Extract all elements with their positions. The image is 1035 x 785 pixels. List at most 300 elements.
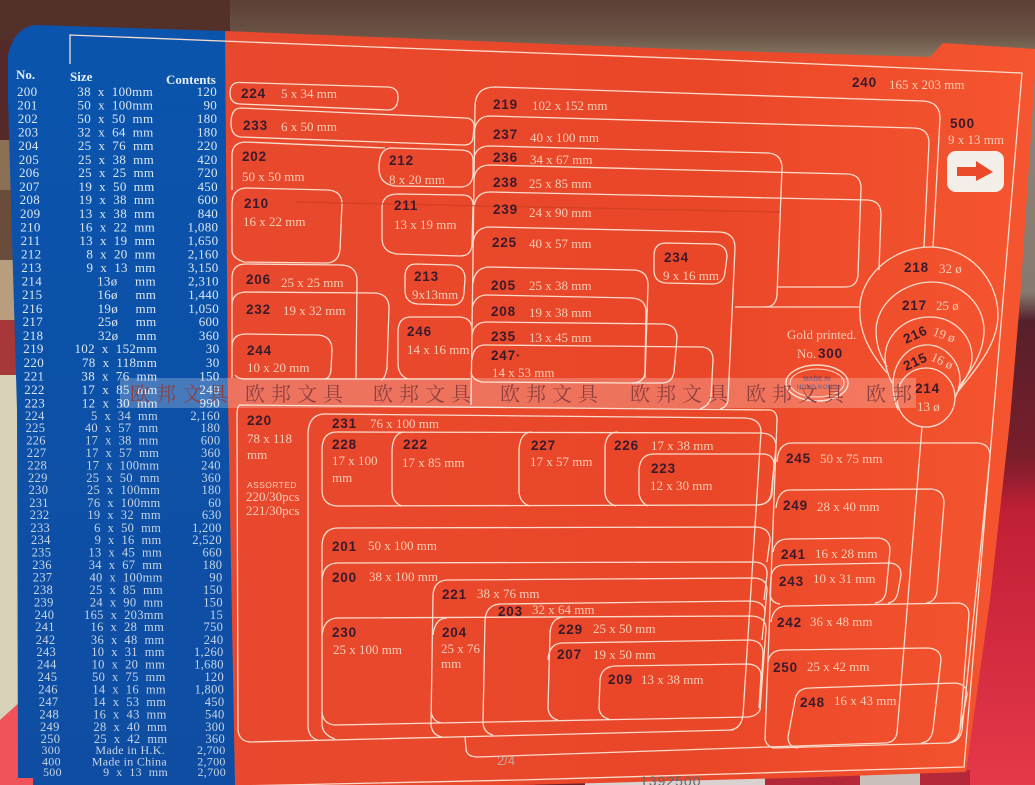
table rows 200 to 223: 19ø mm (98, 301, 156, 316)
table rows 200 to 223: 202 (18, 111, 38, 126)
table rows 224 to 500: 14 x 16 mm (92, 682, 166, 696)
table rows 224 to 500: 246 (38, 682, 58, 696)
label dimensions: 34 x 67 mm (530, 152, 592, 167)
table rows 224 to 500: 241 (35, 620, 55, 634)
table rows 224 to 500: 233 (30, 521, 50, 535)
table rows 224 to 500: 10 x 20 mm (92, 658, 165, 672)
table rows 224 to 500: 1,800 (195, 682, 224, 696)
upper-left label outlines (230, 82, 474, 380)
table rows 224 to 500: 235 (32, 546, 51, 560)
table rows 224 to 500: 228 (27, 458, 47, 472)
table rows 224 to 500: 9 x 13 mm (103, 765, 168, 779)
table rows 200 to 223: 205 (19, 152, 39, 167)
table rows 200 to 223: 600 (198, 192, 218, 207)
table rows 200 to 223: 240 (199, 382, 220, 397)
table rows 224 to 500: 13 x 45 mm (88, 546, 162, 560)
table rows 224 to 500: 60 (208, 496, 221, 510)
table rows 200 to 223: 2,160 (188, 246, 218, 262)
table rows 200 to 223: 223 (25, 396, 45, 410)
icon: made in Hong Kong oval seal (786, 365, 848, 401)
label numbers: 239 (493, 202, 518, 217)
label dimensions: 50 x 50 mm (242, 169, 304, 184)
table rows 224 to 500: 750 (204, 620, 223, 634)
label numbers: 249 (783, 498, 808, 513)
table rows 200 to 223: 215 (22, 287, 42, 302)
table rows 200 to 223: 8 x 20 mm (86, 246, 156, 262)
table rows 200 to 223: 30 (206, 355, 220, 370)
label numbers: 213 (414, 269, 439, 284)
table rows 224 to 500: 600 (201, 434, 220, 448)
table rows 200 to 223: 990 (199, 396, 220, 410)
table rows 224 to 500: 10 x 31 mm (91, 645, 165, 659)
label numbers: 237 (493, 127, 518, 142)
table rows 200 to 223: 50 x 100mm (77, 98, 153, 112)
label dimensions: 38 x 100 mm (369, 569, 438, 584)
assorted note: 221/30pcs (246, 503, 299, 518)
label dimensions: mm (247, 447, 267, 462)
table rows 200 to 223: 25 x 25 mm (78, 165, 154, 180)
table rows 224 to 500: Made in H.K. (95, 743, 165, 757)
label numbers: 226 (614, 438, 639, 453)
table rows 200 to 223: 214 (22, 274, 42, 288)
table rows 224 to 500: 1,680 (194, 658, 224, 672)
assorted note: 220/30pcs (246, 489, 299, 504)
table rows 200 to 223: 16ø mm (97, 287, 156, 302)
label dimensions: 32 ø (939, 261, 962, 276)
table rows 200 to 223: 211 (21, 233, 41, 248)
table rows 200 to 223: 1,650 (188, 233, 218, 248)
watermark band: 欧邦文具 (130, 383, 234, 406)
table rows 224 to 500: 227 (27, 446, 46, 460)
table rows 200 to 223: 25 x 38 mm (78, 152, 154, 167)
label dimensions: 25 ø (936, 298, 959, 313)
label numbers: 245 (786, 451, 811, 466)
label numbers: 225 (492, 235, 517, 250)
label numbers: 211 (394, 198, 418, 213)
table rows 224 to 500: 229 (28, 471, 48, 485)
table rows 224 to 500: 630 (202, 508, 222, 522)
table rows 224 to 500: 6 x 50 mm (94, 521, 161, 535)
table rows 200 to 223: 216 (22, 301, 43, 316)
label dimensions: 25 x 25 mm (281, 275, 343, 290)
table rows 224 to 500: 360 (201, 471, 221, 485)
label numbers: 214 (915, 381, 940, 396)
table header: No. (16, 67, 35, 82)
table rows 200 to 223: 180 (197, 124, 217, 140)
label numbers: 219 (493, 97, 518, 112)
label dimensions: 36 x 48 mm (810, 614, 872, 629)
table rows 224 to 500: 180 (201, 421, 220, 435)
label numbers: 222 (403, 437, 428, 452)
table rows 224 to 500: 17 x 100mm (86, 458, 159, 472)
label numbers: 200 (332, 570, 357, 585)
table rows 224 to 500: 400 (42, 754, 61, 768)
table rows 200 to 223: 600 (199, 314, 219, 329)
label numbers: 202 (242, 149, 267, 164)
table rows 200 to 223: 1,050 (188, 301, 219, 316)
red sheet with folder tab (225, 31, 1035, 785)
label numbers: 229 (558, 622, 583, 637)
label dimensions: 102 x 152 mm (532, 98, 607, 113)
table rows 200 to 223: 210 (20, 220, 41, 234)
label dimensions: 25 x 76 (441, 641, 480, 656)
label dimensions: 25 x 85 mm (529, 176, 591, 191)
table header (16, 67, 216, 87)
table rows 224 to 500: 360 (201, 446, 221, 460)
table rows 224 to 500: 150 (203, 583, 223, 597)
label dimensions: 16 x 43 mm (834, 693, 896, 708)
blue table panel (8, 25, 235, 785)
table rows 224 to 500: 50 x 75 mm (92, 670, 166, 684)
assorted note (246, 480, 299, 518)
label dimensions: 13 x 45 mm (529, 330, 591, 345)
table rows 224 to 500: 90 (209, 570, 222, 584)
table rows 200 to 223: 217 (23, 314, 43, 329)
table rows 200 to 223: 150 (199, 368, 220, 384)
label numbers: 227 (531, 438, 556, 453)
table rows 200 to 223: 219 (23, 341, 44, 356)
nested circle labels (860, 247, 998, 427)
table rows 224 to 500: 224 (25, 409, 45, 423)
table rows 200 to 223: 220 (197, 138, 218, 153)
table rows 224 to 500: 240 (201, 458, 221, 472)
label dimensions: 50 x 75 mm (820, 451, 882, 466)
lower-left label outlines (237, 405, 777, 748)
label dimensions: 17 x 38 mm (651, 438, 713, 453)
table rows 224 to 500: 25 x 42 mm (94, 732, 167, 746)
table rows 200 to 223: 208 (20, 192, 40, 207)
label dimensions: 38 x 76 mm (477, 586, 539, 601)
label numbers: 228 (332, 437, 357, 452)
table rows 224 to 500: 230 (29, 483, 48, 497)
table rows 200 to 223: 450 (197, 179, 218, 194)
label numbers: 244 (247, 343, 272, 358)
label numbers: 215 (901, 350, 930, 374)
table rows 200 to 223: 222 (24, 382, 45, 397)
table rows 224 to 500: 360 (205, 732, 225, 746)
table rows 200 to 223: 2,310 (188, 274, 219, 288)
table rows 200 to 223: 360 (199, 328, 219, 343)
table rows 224 to 500: 2,700 (197, 754, 226, 768)
table rows 224 to 500: 243 (36, 645, 56, 659)
gold printed note: Gold printed. (787, 327, 856, 342)
size table (16, 67, 226, 779)
label numbers: 243 (779, 574, 804, 589)
label numbers: 238 (493, 175, 518, 190)
table rows 200 to 223: 180 (197, 111, 217, 126)
table rows 200 to 223 (17, 84, 220, 410)
label dimensions: 24 x 90 mm (529, 205, 591, 220)
label numbers: 224 (241, 86, 266, 101)
label numbers: 231 (332, 416, 357, 431)
upper-centre label outlines (465, 87, 940, 757)
table rows 224 to 500: 16 x 28 mm (91, 620, 164, 634)
table rows 200 to 223: 19 x 50 mm (79, 179, 154, 194)
table rows 224 to 500: 180 (201, 483, 221, 497)
label numbers: 218 (904, 260, 929, 275)
label dimensions: 19 ø (931, 324, 958, 346)
label dimensions: 76 x 100 mm (370, 416, 439, 431)
label dimensions: 16 ø (929, 349, 956, 373)
label dimensions: 40 x 57 mm (529, 236, 591, 251)
label numbers: 208 (491, 304, 516, 319)
label numbers: 220 (247, 413, 272, 428)
watermark band: 欧邦文具 (245, 383, 349, 406)
table rows 224 to 500 (25, 409, 226, 779)
table rows 224 to 500: 237 (33, 570, 52, 584)
label dimensions: 16 x 28 mm (815, 546, 877, 561)
label dimensions: 5 x 34 mm (281, 86, 337, 101)
table rows 200 to 223: 218 (23, 328, 43, 343)
label dimensions: 8 x 20 mm (389, 172, 445, 187)
table rows 224 to 500: 2,520 (192, 533, 222, 547)
table rows 200 to 223: 207 (19, 179, 40, 194)
label numbers: 236 (493, 150, 518, 165)
table rows 200 to 223: 30 (206, 341, 219, 356)
label numbers: 204 (442, 625, 467, 640)
label numbers: 500 (950, 116, 975, 131)
table rows 200 to 223: 102 x 152mm (74, 341, 157, 356)
sheet fold crease (295, 202, 780, 212)
table rows 224 to 500: 240 (204, 633, 223, 647)
table rows 224 to 500: 225 (26, 421, 45, 435)
table rows 224 to 500: 24 x 90 mm (90, 596, 163, 610)
label dimensions: 14 x 53 mm (492, 365, 554, 380)
label dimensions: 50 x 100 mm (368, 538, 437, 553)
watermark band: 欧邦 (866, 383, 918, 406)
label dimensions: 19 x 38 mm (529, 305, 591, 320)
table rows 224 to 500: 5 x 34 mm (91, 409, 158, 423)
label dimensions: 25 x 50 mm (593, 621, 655, 636)
table rows 224 to 500: 238 (33, 583, 53, 597)
table rows 200 to 223: 420 (197, 152, 218, 167)
label numbers: 210 (244, 196, 269, 211)
table rows 224 to 500: 660 (202, 546, 222, 560)
table rows 224 to 500: 180 (203, 558, 222, 572)
table rows 224 to 500: Made in China (92, 754, 167, 768)
label numbers: 232 (246, 302, 271, 317)
table rows 200 to 223: 1,440 (188, 287, 219, 302)
table rows 200 to 223: 13ø mm (97, 274, 156, 288)
watermark band: 欧邦文具 (373, 383, 477, 406)
table rows 224 to 500: 247 (39, 695, 58, 709)
label dimensions: 78 x 118 (247, 431, 292, 446)
label numbers (241, 75, 975, 710)
table rows 200 to 223: 16 x 22 mm (79, 220, 155, 234)
table rows 200 to 223: 120 (197, 84, 217, 99)
label dimensions: 19 x 32 mm (283, 303, 345, 318)
watermark band: 欧邦文具 (746, 383, 850, 406)
label numbers: 242 (777, 615, 802, 630)
label dimensions: 17 x 57 mm (530, 454, 592, 469)
label numbers: 230 (332, 625, 357, 640)
label dimensions: 6 x 50 mm (281, 119, 337, 134)
table rows 224 to 500: 25 x 100mm (87, 483, 160, 497)
table rows 224 to 500: 165 x 203mm (84, 608, 164, 622)
table rows 224 to 500: 300 (42, 743, 60, 757)
label dimensions: 9 x 13 mm (948, 132, 1004, 147)
icon: made in Hong Kong oval seal: MADE IN (803, 376, 831, 383)
label numbers: 217 (902, 298, 927, 313)
label numbers: 240 (852, 75, 877, 90)
table rows 224 to 500: 240 (35, 608, 54, 622)
table rows 224 to 500: 19 x 32 mm (87, 508, 161, 522)
label dimensions: 40 x 100 mm (530, 130, 599, 145)
table rows 200 to 223: 201 (17, 98, 38, 112)
table rows 200 to 223: 206 (19, 165, 40, 180)
label dimensions: 19 x 50 mm (593, 647, 655, 662)
label numbers: 233 (243, 118, 268, 133)
label numbers: 201 (332, 539, 357, 554)
table rows 200 to 223: 220 (24, 355, 44, 370)
table rows 200 to 223: 50 x 50 mm (77, 111, 153, 126)
label dimensions: 13 x 19 mm (394, 217, 456, 232)
table rows 224 to 500: 40 x 57 mm (85, 421, 158, 435)
table rows 224 to 500: 36 x 48 mm (91, 633, 164, 647)
table rows 224 to 500: 242 (36, 633, 55, 647)
label dimensions: 32 x 64 mm (532, 602, 594, 617)
table rows 224 to 500: 34 x 67 mm (89, 558, 162, 572)
label dimensions: mm (332, 470, 352, 485)
table rows 224 to 500: 244 (37, 658, 57, 672)
table rows 200 to 223: 12 x 30 mm (82, 396, 158, 410)
label numbers: 247· (491, 348, 521, 363)
table rows 224 to 500: 250 (41, 732, 60, 746)
table rows 200 to 223: 200 (17, 84, 37, 99)
watermark band (120, 378, 918, 408)
table rows 224 to 500: 236 (32, 558, 52, 572)
table rows 224 to 500: 1,260 (194, 645, 224, 659)
label dimensions: 13 x 38 mm (641, 672, 703, 687)
table rows 224 to 500: 76 x 100mm (87, 496, 160, 510)
icon: made in Hong Kong oval seal: HONG KONG (797, 384, 837, 391)
label dimensions: 28 x 40 mm (817, 499, 879, 514)
table rows 200 to 223: 221 (24, 368, 44, 384)
table rows 200 to 223: 204 (18, 138, 39, 153)
label dimensions: 17 x 100 (332, 453, 378, 468)
table rows 224 to 500: 2,700 (197, 743, 226, 757)
table rows 224 to 500: 17 x 57 mm (86, 446, 159, 460)
table rows 224 to 500: 226 (26, 434, 46, 448)
table rows 224 to 500: 28 x 40 mm (93, 720, 167, 734)
table rows 200 to 223: 1,080 (188, 220, 218, 234)
table rows 224 to 500: 232 (30, 508, 49, 522)
table rows 224 to 500: 16 x 43 mm (93, 708, 167, 722)
label numbers: 300 (818, 346, 843, 361)
label numbers: 246 (407, 324, 432, 339)
table rows 200 to 223: 19 x 38 mm (79, 192, 155, 207)
table rows 224 to 500: 540 (205, 708, 225, 722)
table rows 200 to 223: 90 (203, 98, 217, 112)
label dimensions: 10 x 20 mm (247, 360, 309, 375)
table rows 224 to 500: 234 (31, 533, 51, 547)
table rows 224 to 500: 2,160 (190, 409, 220, 423)
label dimensions: 9 x 16 mm (663, 268, 719, 283)
label dimensions: 12 x 30 mm (650, 478, 712, 493)
label numbers: 250 (773, 660, 798, 675)
label dimensions: 25 x 100 mm (333, 642, 402, 657)
table rows 200 to 223: 9 x 13 mm (87, 260, 156, 275)
label dimensions: 10 x 31 mm (813, 571, 875, 586)
label dimensions: 17 x 85 mm (402, 455, 464, 470)
table rows 224 to 500: 15 (210, 608, 223, 622)
label numbers: 235 (491, 329, 516, 344)
label numbers: 207 (557, 647, 582, 662)
label numbers: 234 (664, 250, 689, 265)
icon: arrow label 500 (947, 151, 1004, 192)
table header: Size (70, 69, 93, 84)
table rows 200 to 223: 32ø mm (98, 328, 157, 343)
table rows 200 to 223: 32 x 64 mm (78, 124, 154, 140)
label numbers: 209 (608, 672, 633, 687)
table rows 224 to 500: 40 x 100mm (89, 570, 163, 584)
watermark band: 欧邦文具 (630, 383, 734, 406)
label numbers: 241 (781, 547, 806, 562)
lower-right label outlines (768, 443, 990, 748)
assorted note: ASSORTED (247, 480, 297, 490)
table rows 224 to 500: 120 (204, 670, 224, 684)
table rows 200 to 223: 13 x 38 mm (79, 206, 155, 221)
table rows 224 to 500: 25 x 85 mm (89, 583, 163, 597)
table rows 224 to 500: 14 x 53 mm (93, 695, 166, 709)
table rows 200 to 223: 213 (21, 260, 42, 275)
table rows 200 to 223: 212 (21, 246, 41, 262)
table rows 200 to 223: 13 x 19 mm (79, 233, 155, 248)
table rows 224 to 500: 17 x 38 mm (85, 434, 159, 448)
table rows 224 to 500: 500 (43, 765, 62, 779)
gold printed note: No. (797, 346, 816, 361)
table rows 224 to 500: 245 (38, 670, 57, 684)
label dimensions (242, 77, 1004, 708)
label numbers: 203 (498, 604, 523, 619)
table rows 200 to 223: 720 (197, 165, 218, 180)
table header: Contents (166, 72, 216, 87)
table rows 200 to 223: 25 x 76 mm (78, 138, 154, 153)
label numbers: 223 (651, 461, 676, 476)
table rows 200 to 223: 78 x 118mm (82, 355, 157, 370)
gold printed note (787, 327, 856, 361)
table rows 224 to 500: 248 (39, 708, 59, 722)
table rows 224 to 500: 1,200 (192, 521, 222, 535)
label dimensions: 25 x 38 mm (529, 278, 591, 293)
table rows 200 to 223: 38 x 100mm (77, 84, 153, 99)
table rows 224 to 500: 231 (29, 496, 49, 510)
label dimensions: 9x13mm (412, 287, 458, 302)
label dimensions: mm (441, 656, 461, 671)
table rows 224 to 500: 300 (205, 720, 225, 734)
table rows 224 to 500: 450 (205, 695, 224, 709)
label numbers: 221 (442, 587, 467, 602)
table rows 224 to 500: 9 x 16 mm (95, 533, 162, 547)
label dimensions: 25 x 42 mm (807, 659, 869, 674)
label numbers: 216 (901, 323, 930, 347)
label numbers: 248 (800, 695, 825, 710)
table rows 224 to 500: 239 (34, 596, 54, 610)
label numbers: 212 (389, 153, 414, 168)
table rows 200 to 223: 203 (18, 124, 38, 140)
table rows 200 to 223: 840 (198, 206, 218, 221)
table rows 200 to 223: 209 (20, 206, 40, 221)
table rows 200 to 223: 25ø mm (98, 314, 157, 329)
label numbers: 206 (246, 272, 271, 287)
table rows 224 to 500: 25 x 50 mm (86, 471, 160, 485)
table rows 224 to 500: 150 (203, 596, 223, 610)
page counter: 2/4 (497, 753, 515, 768)
label numbers: 205 (491, 278, 516, 293)
table rows 200 to 223: 17 x 85 mm (82, 382, 158, 397)
watermark band: 欧邦文具 (500, 383, 604, 406)
label dimensions: 165 x 203 mm (889, 77, 964, 92)
